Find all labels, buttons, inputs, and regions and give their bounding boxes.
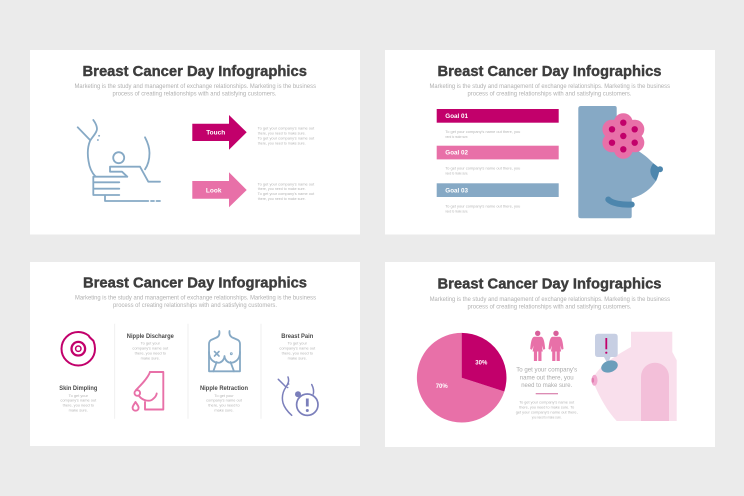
label: nipple retraction: company's name out [206,398,243,403]
icon: nipple retraction [209,331,240,371]
text block: touch [258,126,315,145]
label: nipple retraction: there, you need to [208,403,240,408]
goal 03: need to make sure. [445,208,468,213]
title: Breast Cancer Day Infographics [82,63,307,80]
text block: large statement: name out there, you [520,374,574,381]
label: skin dimpling: Skin Dimpling [59,385,97,392]
text block: touch: To get your company's name out [258,126,315,131]
subtitle: Marketing is the study and management of exchange relationships. Marketing is the business [430,83,671,90]
text block: look: there, you need to make sure. [258,196,306,201]
label: nipple retraction: Nipple Retraction [200,385,248,392]
goal 02: Goal 02 [445,150,469,157]
label: skin dimpling: make sure. [69,408,88,413]
arrow: touch [192,115,247,150]
text block: large statement: need to make sure. [521,382,572,389]
text block: small statement [516,400,578,419]
title: Breast Cancer Day Infographics [438,63,662,80]
goal 01: Goal 01 [445,113,469,120]
label: nipple discharge [127,333,174,360]
label: skin dimpling: there, you need to [63,403,94,408]
label: skin dimpling: To get your [69,393,89,398]
panel: goals [385,50,715,234]
text block: large statement: To get your company's [516,367,578,374]
subtitle: Marketing is the study and management of exchange relationships. Marketing is the business [75,295,317,302]
goal 02: need to make sure. [445,171,468,176]
label: nipple retraction [200,385,248,413]
label: nipple retraction: make sure. [214,408,234,413]
subtitle [75,295,317,309]
label: breast pain: company's name out [279,345,316,350]
subtitle: process of creating relationships with and satisfying customers. [113,302,277,309]
goal 01: To get your company's name out there, you [445,129,520,134]
label: nipple discharge: Nipple Discharge [127,333,174,340]
subtitle [430,83,671,98]
pie chart: 30% [475,360,488,366]
goal 01 [437,109,559,139]
subtitle: process of creating relationships with and satisfying customers. [468,304,632,311]
icon: self examination line art [78,120,160,201]
text block: look: To get your company's name out [258,191,315,196]
title: Breast Cancer Day Infographics [438,276,662,293]
illustration: breast with tumour cluster [578,106,663,218]
illustration: breast with warning callout [592,332,677,421]
label: breast pain: To get your [288,341,308,346]
label: breast pain: make sure. [288,355,307,360]
callout: warning [595,334,619,375]
label: skin dimpling: company's name out [60,398,97,403]
label: nipple retraction: To get your [214,393,234,398]
goal 02: To get your company's name out there, you [445,166,520,171]
text block: small statement: To get your company's name out [519,400,575,405]
icon: skin dimpling [62,332,95,366]
label: nipple discharge: company's name out [132,345,169,350]
panel: statistics [385,262,715,447]
goal 01: need to make sure. [445,134,468,139]
label: breast pain [279,333,316,360]
icon: two women [530,331,564,361]
text block: touch: there, you need to make sure. [258,130,306,135]
goal 03: Goal 03 [445,187,469,194]
label: nipple discharge: there, you need to [135,350,166,355]
subtitle: process of creating relationships with and satisfying customers. [112,90,277,98]
arrow: look: Look [206,187,222,194]
text block: look: To get your company's name out [258,181,315,186]
label: nipple discharge: make sure. [141,355,160,360]
panel: symptoms [30,262,360,446]
label: breast pain: Breast Pain [281,333,313,340]
tumour cluster [602,113,644,159]
subtitle: Marketing is the study and management of exchange relationships. Marketing is the business [430,296,671,303]
text block: small statement: there, you need to make sure. To [519,404,574,409]
label: breast pain: there, you need to [282,350,313,355]
goal 02 [437,146,559,176]
text block: small statement: get your company's name out there, [516,409,578,414]
icon: nipple discharge [133,372,163,411]
arrow: touch: Touch [206,129,225,136]
subtitle: Marketing is the study and management of exchange relationships. Marketing is the business [74,83,317,90]
label: skin dimpling [59,385,97,413]
pie chart: 70% [436,384,448,390]
icon: breast pain [278,377,318,415]
label: nipple discharge: To get your [141,341,161,346]
goal 03 [437,183,559,213]
text block: look: there, you need to make sure. [258,186,306,191]
arrow: look [192,172,247,207]
panel: touch and look [30,50,360,234]
pie chart [417,333,506,423]
text block: touch: there, you need to make sure. [258,140,306,145]
subtitle: process of creating relationships with and satisfying customers. [468,90,632,98]
text block: touch: To get your company's name out [258,135,315,140]
text block: look [258,181,315,201]
title: Breast Cancer Day Infographics [83,275,307,292]
text block: large statement [516,367,578,389]
subtitle [430,296,671,311]
text block: small statement: you need to make sure. [532,414,562,419]
subtitle [74,83,317,98]
goal 03: To get your company's name out there, you [445,203,520,208]
